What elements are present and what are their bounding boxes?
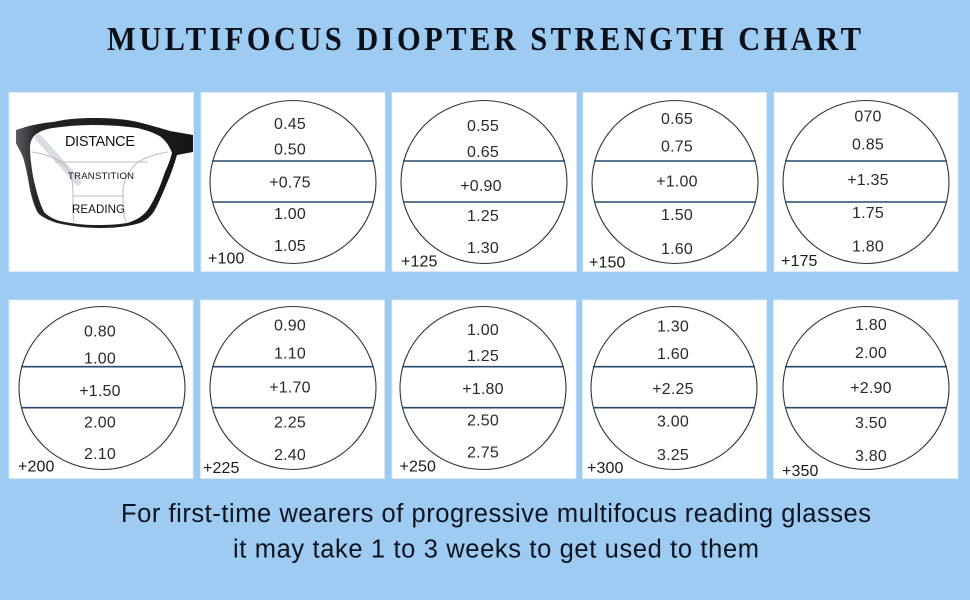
panel: +150: +1.00 [656, 174, 698, 191]
panel: +250: +1.80 [462, 381, 504, 398]
panel: +175: +1.35 [847, 172, 889, 189]
panel: +200: 0.80 [84, 324, 116, 341]
panel: +175: +175 [781, 253, 817, 270]
panel: +150: 0.65 [661, 111, 693, 128]
panel: +350: 3.80 [855, 448, 887, 465]
panel: +300: +2.25 [652, 381, 694, 398]
panel: +225: 0.90 [274, 318, 306, 335]
panel: +100 [201, 92, 385, 272]
panel: +150: 1.50 [661, 207, 693, 224]
panel: +350: 1.80 [855, 317, 887, 334]
panel: +350: 3.50 [855, 415, 887, 432]
panel: +350: +2.90 [850, 380, 892, 397]
panel: +200: +200 [18, 459, 54, 476]
panel: +300: 3.00 [657, 414, 689, 431]
panel: +100: +0.75 [269, 174, 311, 191]
panel: glasses lens diagram [9, 92, 194, 272]
footer note [121, 500, 871, 564]
panel: +125: 0.55 [467, 118, 499, 135]
panel: +125: 1.30 [467, 240, 499, 257]
panel: +250: +250 [400, 459, 436, 476]
panel: +300 [582, 300, 766, 478]
title: MULTIFOCUS DIOPTER STRENGTH CHART [107, 20, 861, 58]
panel: +200: 1.00 [84, 350, 116, 367]
panel: +100: 1.00 [274, 206, 306, 223]
panel: +100: 0.50 [274, 141, 306, 158]
panel: +175: 070 [854, 109, 882, 126]
panel: +250: 1.25 [467, 348, 499, 365]
panel: +150 [583, 92, 766, 272]
panel: +125: +0.90 [460, 178, 502, 195]
panel: +100: 1.05 [274, 238, 306, 255]
footer note: it may take 1 to 3 weeks to get used to them [233, 536, 759, 564]
panel: +350: 2.00 [855, 345, 887, 362]
panel: +300: 1.60 [657, 346, 689, 363]
label: transition: TRANSTITION [68, 171, 134, 182]
panel: +150: +150 [589, 254, 625, 271]
panel: +225: 1.10 [274, 345, 306, 362]
panel: +125 [392, 92, 576, 272]
panel: +100: 0.45 [274, 116, 306, 133]
panel: +175: 0.85 [852, 136, 884, 153]
panel: +300: 1.30 [657, 319, 689, 336]
panel: +100: +100 [208, 250, 244, 267]
panel: +250 [392, 300, 576, 478]
panel: +200: +1.50 [79, 383, 121, 400]
panel: +225 [200, 300, 384, 478]
label: distance: DISTANCE [65, 134, 135, 150]
panel: +225: +225 [203, 460, 239, 477]
panel: +250: 1.00 [467, 322, 499, 339]
panel: +200: 2.10 [84, 446, 116, 463]
panel: +225: 2.25 [274, 414, 306, 431]
panel: +250: 2.50 [467, 413, 499, 430]
panel: +150: 0.75 [661, 139, 693, 156]
panel: +125: 0.65 [467, 144, 499, 161]
footer note: For first-time wearers of progressive multifocus reading glasses [121, 500, 871, 528]
panel: +175: 1.80 [852, 239, 884, 256]
panel: +300: +300 [587, 460, 623, 477]
panel: +150: 1.60 [661, 241, 693, 258]
panel: +225: +1.70 [269, 380, 311, 397]
panel: +225: 2.40 [274, 447, 306, 464]
panel: +175: 1.75 [852, 205, 884, 222]
panel: +250: 2.75 [467, 445, 499, 462]
label: reading: READING [72, 204, 125, 216]
panel: +200: 2.00 [84, 414, 116, 431]
panel: +300: 3.25 [657, 447, 689, 464]
panel: +350 [774, 300, 958, 480]
icon: glasses frame [16, 118, 193, 228]
panel: +125: +125 [401, 254, 437, 270]
panel: +125: 1.25 [467, 208, 499, 225]
panel: +175 [774, 92, 958, 272]
panel: +350: +350 [782, 463, 818, 480]
panel: +200 [9, 300, 193, 478]
